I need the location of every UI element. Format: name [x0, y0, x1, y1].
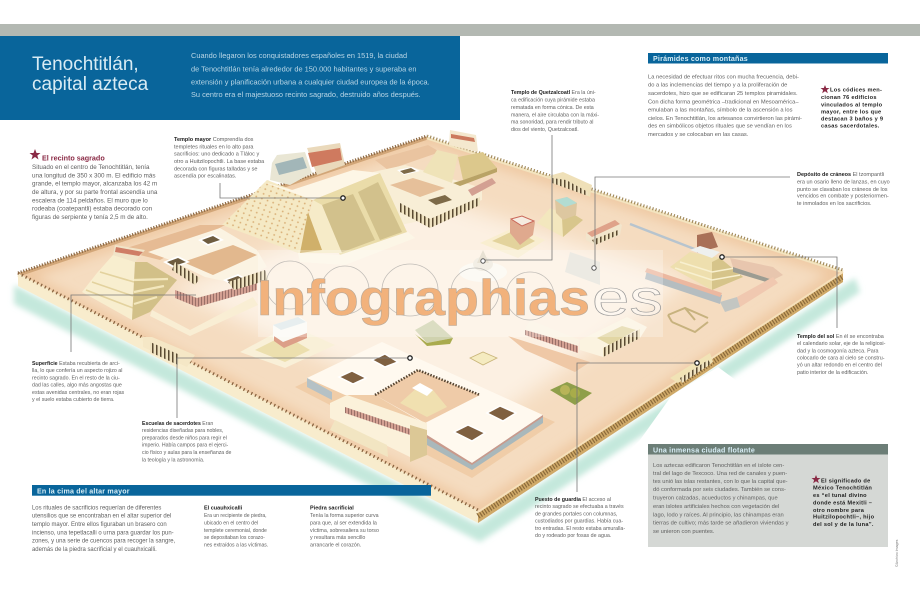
- label: Templo del sol: patio interior de la edificación.: [797, 370, 868, 376]
- building: front courtyard complex (priests' schools): [295, 342, 555, 478]
- body: tes unió las islas restantes, con lo que la capital que-: [653, 479, 788, 485]
- body: se unieron con puentes.: [653, 529, 715, 535]
- icon: star: [820, 85, 830, 93]
- intro text: de Tenochtitlán tenía alrededor de 150.000 habitantes y superaba en: [191, 64, 416, 74]
- body: figuras de serpiente y tenía 2,5 m de alto.: [32, 214, 148, 221]
- stock watermark: Infographias: [257, 270, 590, 326]
- text: El cuauhxicalli: se depositaban los corazo-: [204, 535, 265, 541]
- intro text: Cuando llegaron los conquistadores españoles en 1519, la ciudad: [191, 51, 407, 60]
- label: Depósito de cráneos: te inmolados en los sacrificios.: [797, 201, 872, 207]
- label: Puesto de guardia: do y rodeado por fosas de agua.: [535, 533, 611, 539]
- leader: Escuelas de sacerdotes: [177, 356, 412, 418]
- stock watermark: [257, 250, 663, 337]
- building: red-topped pyramid: [480, 216, 545, 258]
- label: Templo del sol: yó un altar redondo en el centro del: [797, 362, 882, 368]
- label: Puesto de guardia: tro entradas. El resto estaba amuralla-: [535, 526, 625, 532]
- body: incienso, una tepetlacalli o urna para guardar los pun-: [32, 530, 174, 536]
- label: Superficie: y el suelo estaba cubierto de tierra.: [32, 397, 114, 403]
- body: des en simbólicos objetos rituales que se vendían en los: [648, 124, 792, 130]
- red shrine: [307, 143, 345, 175]
- intro text: Su centro era el majestuoso recinto sagrado, destruido años después.: [191, 90, 421, 99]
- label: Templo de Quetzalcoatl: dios del viento, Quetzalcoatl.: [511, 127, 579, 133]
- label: Templo mayor: sacrificios: uno dedicado a Tláloc y: [174, 152, 259, 158]
- text: Piedra sacrificial: para que, al ser extendida la: [310, 520, 377, 526]
- courtyard: [375, 370, 480, 423]
- text: El cuauhxicalli: nes extraídos a las víctimas.: [204, 542, 268, 548]
- building: front-left small pyramid: [240, 317, 335, 368]
- intro text: extensión y planificación urbana a cualquier ciudad europea de la época.: [191, 78, 430, 86]
- stock watermark: es: [592, 270, 663, 326]
- callout: otro nombre para: [813, 508, 865, 514]
- body: una longitud de 350 x 300 m. El edificio más: [32, 172, 156, 179]
- body: eran islotes artificiales hechos con vegetación del: [653, 504, 779, 510]
- body: tierras de cultivo; más tarde se añadieron viviendas y: [653, 520, 789, 526]
- label: Escuelas de sacerdotes: residencias diseñadas para nobles,: [142, 428, 223, 434]
- top grey strip: [0, 24, 920, 36]
- body: lago, lodo y raíces. Al principio, las chinampas eran: [653, 512, 784, 518]
- body: grande, el templo mayor, alcanzaba los 42 m: [32, 181, 157, 188]
- text: El cuauhxicalli: ubicado en el centro del: [204, 520, 258, 526]
- blue shrine: [270, 152, 312, 185]
- panel: En la cima del altar mayor: [32, 485, 431, 553]
- leader: Depósito de cráneos: [592, 177, 790, 270]
- label: Templo mayor: ascendía por escalinatas.: [174, 174, 237, 180]
- panel background: [648, 444, 888, 547]
- label: Escuelas de sacerdotes: la teología y la astronomía.: [142, 458, 204, 464]
- garden plots and small shrines: [415, 320, 592, 405]
- panel: title banner: [0, 36, 460, 120]
- label: Templo mayor: Comprendía dos: [213, 137, 254, 143]
- apron: [295, 345, 555, 478]
- leader: Puesto de guardia: [577, 361, 699, 492]
- leader: Templo del sol: [720, 255, 837, 328]
- title: Tenochtitlán,: [32, 54, 139, 75]
- label: Depósito de cráneos: El tzompantli: [853, 172, 884, 178]
- heading: Una inmensa ciudad flotante: [653, 446, 755, 454]
- body: dó conformada por seis ciudades. También se cons-: [653, 487, 786, 493]
- body: emulaban a las montañas, símbolo de la ascensión a los: [648, 108, 793, 114]
- roof: [307, 342, 543, 465]
- panel: Pirámides como montañas: [648, 53, 888, 138]
- body: Con dicha forma geométrica –tradicional en Mesoamérica–: [648, 100, 799, 106]
- water surrounding the platform: [14, 278, 860, 560]
- building: northern gate: [545, 172, 592, 197]
- pyramid left face with dots: [222, 180, 313, 253]
- body: rodeaba (coatepantli) estaba decorado con: [32, 206, 153, 213]
- callout: cionan 76 edificios: [821, 95, 877, 101]
- body: mercados y se colocaban en las casas.: [648, 132, 749, 138]
- label: Templo de Quetzalcoatl: ca edificación cuya pirámide estaba: [511, 98, 595, 104]
- coloured wall bands: [307, 378, 332, 400]
- panel: Una inmensa ciudad flotante: [648, 444, 888, 547]
- text: Piedra sacrificial: y resultara más sencillo: [310, 535, 365, 541]
- body: cielos. En Tenochtitlán, los artesanos convirtieron las pirámi-: [648, 116, 802, 122]
- label: Puesto de guardia: recinto sagrado se efectuaba a través: [535, 504, 624, 510]
- label: Depósito de cráneos: Depósito de cráneos: [797, 172, 853, 178]
- label: Superficie: Estaba recubierta de arci-: [59, 361, 120, 367]
- leader: Templo mayor: [220, 183, 345, 200]
- callout: mayor, entre los que: [821, 110, 881, 116]
- heading bar: [32, 485, 431, 496]
- label: Escuelas de sacerdotes: Eran: [202, 421, 213, 427]
- pyramid front staircases: [313, 173, 407, 255]
- title: capital azteca: [32, 74, 149, 95]
- body: do a las inclemencias del tiempo y a la proliferación de: [648, 82, 787, 88]
- label: Templo mayor: Templo mayor: [174, 137, 213, 143]
- label: Superficie: estas avenidas centrales, no eran rojas: [32, 390, 125, 396]
- building: Templo mayor: [222, 143, 415, 265]
- label: Templo de Quetzalcoatl: Templo de Quetzalcoatl: [511, 90, 572, 96]
- building: southern gate: [670, 353, 713, 383]
- label: Templo de Quetzalcoatl: Era la úni-: [572, 90, 596, 96]
- callout: México Tenochtitlán: [813, 486, 872, 492]
- icon: star: [812, 475, 820, 483]
- body: Situado en el centro de Tenochtitlán, tenía: [32, 164, 150, 171]
- label: Templo del sol: dad y la cosmogonía azteca. Para: [797, 348, 879, 354]
- callout: del sol y de la luna”.: [813, 522, 874, 528]
- label: Templo de Quetzalcoatl: rematada en forma cónica. De esta: [511, 105, 594, 111]
- text block: El recinto sagrado: [30, 149, 158, 221]
- heading bar: [648, 444, 888, 454]
- body: zones, y una serie de cuencos para recoger la sangre,: [32, 539, 176, 545]
- leader: Templo de Quetzalcoatl: [481, 135, 552, 263]
- label: Depósito de cráneos: vencidos en combate y posteriormen-: [797, 194, 889, 200]
- body: templo mayor. Entre ellos figuraban un brasero con: [32, 522, 167, 528]
- heading: Pirámides como montañas: [653, 55, 748, 63]
- leader: Superficie: [71, 295, 196, 352]
- body: escalera de 114 peldaños. El muro que lo: [32, 197, 148, 204]
- label: Depósito de cráneos: punto se clavaban los cráneos de los: [797, 187, 888, 193]
- building: rear right complex and pyramid: [370, 130, 497, 228]
- pyramid top terrace: [263, 170, 380, 200]
- body: La necesidad de efectuar ritos con mucha frecuencia, debi-: [648, 74, 799, 80]
- label: Escuelas de sacerdotes: preparados desde niños para regir el: [142, 436, 227, 442]
- building: central south palace: [508, 317, 647, 372]
- text: El cuauhxicalli: Era un recipiente de piedra,: [204, 513, 267, 519]
- icon: star: [30, 149, 40, 160]
- body: truyeron calzadas, acueductos y chinampas, que: [653, 496, 778, 502]
- credit line: ©Archivo Images: [895, 539, 899, 567]
- text: Piedra sacrificial: Tenía la forma superior curva: [310, 513, 379, 519]
- heading: El recinto sagrado: [42, 154, 105, 162]
- building: left courtyard complex: [120, 225, 268, 307]
- front block: [330, 395, 427, 457]
- callout: El significado de: [821, 478, 871, 484]
- body: además de la piedra sacrificial y el cuauhxicalli.: [32, 547, 157, 553]
- body: Los aztecas edificaron Tenochtitlán en el islote cen-: [653, 463, 784, 469]
- body: Los rituales de sacrificios requerían de diferentes: [32, 506, 161, 512]
- label: Templo del sol: En él se encontraba: [836, 334, 884, 340]
- body: sacerdotes, hizo que se edificaran 25 templos piramidales.: [648, 91, 798, 97]
- body: de altura, y por su parte frontal ascendía una: [32, 189, 158, 196]
- label: Superficie: dad las calles, algo más angostas que: [32, 382, 122, 388]
- label: Escuelas de sacerdotes: cio físico y aulas para la enseñanza de: [142, 450, 232, 456]
- callout: casas sacerdotales.: [821, 124, 880, 130]
- heading: En la cima del altar mayor: [37, 487, 130, 495]
- building: Templo del sol: [670, 232, 783, 312]
- callout: es “el tunal divino: [813, 493, 867, 499]
- body: utensilios que se encontraban en el altar superior del: [32, 514, 171, 520]
- callout: Los códices men-: [830, 88, 882, 94]
- text: Piedra sacrificial: Piedra sacrificial: [310, 506, 354, 512]
- label: Templo mayor: decorada con figuras talladas y se: [174, 166, 257, 172]
- text: El cuauhxicalli: templete ceremonial, donde: [204, 528, 267, 534]
- label: Superficie: recinto sagrado. En el resto de la ciu-: [32, 376, 120, 382]
- text: Piedra sacrificial: víctima, sobresaliera su torso: [310, 528, 379, 534]
- sacred precinct platform: [18, 136, 843, 523]
- label: Escuelas de sacerdotes: imperio. Había campos para el ejerci-: [142, 442, 228, 448]
- building: left pyramid: [82, 245, 258, 336]
- label: Templo mayor: templetes rituales en lo alto para: [174, 144, 254, 150]
- building: western gate: [143, 337, 195, 367]
- label: Templo de Quetzalcoatl: manera, el aire circulaba con la máxi-: [511, 112, 599, 118]
- text: El cuauhxicalli: El cuauhxicalli: [204, 506, 243, 512]
- building: Templo de Quetzalcoatl round shrine: [459, 250, 507, 282]
- building: skull rack and court walls: [565, 220, 722, 332]
- wells: [339, 354, 516, 441]
- body: tral del lago de Texcoco. Una red de canales y puen-: [653, 471, 787, 477]
- label: Templo del sol: colocarlo de cara al cielo se constru-: [797, 356, 885, 362]
- callout: vinculados al templo: [821, 102, 883, 108]
- heading bar: [648, 53, 888, 64]
- label: Templo del sol: Templo del sol: [797, 334, 836, 340]
- building: teal-topped pyramid: [537, 197, 583, 237]
- callout: donde está Mexitli –: [813, 500, 872, 506]
- callout: destacan 3 baños y 9: [821, 116, 883, 122]
- label: Depósito de cráneos: era un osario lleno de lanzas, en cuyo: [797, 180, 890, 186]
- text: Piedra sacrificial: arrancarle el corazón.: [310, 542, 361, 548]
- label: Puesto de guardia: Puesto de guardia: [535, 497, 582, 503]
- label: Escuelas de sacerdotes: Escuelas de sacerdotes: [142, 421, 202, 427]
- label: Templo del sol: el calendario solar, eje de la religiosi-: [797, 341, 886, 347]
- label: Superficie: Superficie: [32, 361, 59, 367]
- label: Templo de Quetzalcoatl: ma sonoridad, para rendir tributo al: [511, 120, 593, 126]
- small courtyard pyramid: [400, 385, 447, 417]
- label: Puesto de guardia: de grandes portales con columnas,: [535, 512, 617, 518]
- label: Puesto de guardia: El acceso al: [582, 497, 611, 503]
- callout: Huitzilopochtli–, hijo: [813, 514, 875, 520]
- label: Templo mayor: otro a Huitzilopochtli. La base estaba: [174, 159, 265, 165]
- label: Puesto de guardia: custodiados por guardias. Había cua-: [535, 518, 623, 524]
- label: Superficie: lla, lo que confería un aspecto rojizo al: [32, 368, 122, 374]
